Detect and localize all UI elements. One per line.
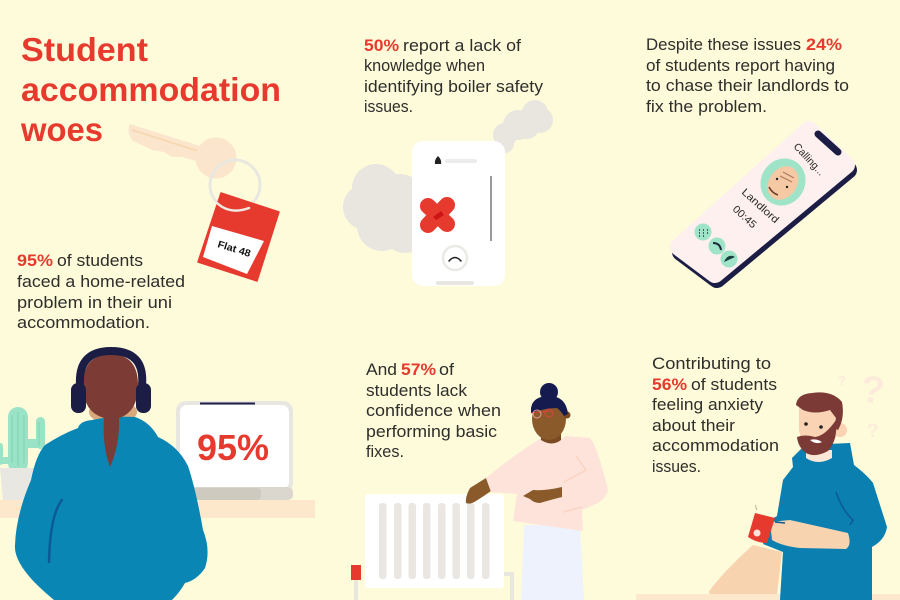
title xyxy=(20,31,281,148)
text block: and 57%: 57% xyxy=(401,360,436,379)
illustration: desk xyxy=(636,594,900,600)
title: Student xyxy=(21,31,148,68)
illustration: student with headphones xyxy=(15,351,208,600)
text block: 95% of students: faced a home-related xyxy=(17,272,185,291)
text block: 95% of students: of students xyxy=(57,251,143,270)
text block: contributing to 56%: accommodation xyxy=(652,436,779,455)
text block: contributing to 56%: about their xyxy=(652,416,735,435)
illustration: phone calling landlord: 00:45 xyxy=(730,203,759,231)
text block: contributing to 56%: issues. xyxy=(652,457,701,476)
text block: and 57%: performing basic xyxy=(366,422,498,441)
text block: despite these issues 24%: Despite these issues xyxy=(646,35,801,54)
illustration: question marks: ? xyxy=(867,421,879,442)
text block: and 57%: And xyxy=(366,360,397,379)
text block: despite these issues 24%: to chase their landlords to xyxy=(646,76,849,95)
illustration: question marks xyxy=(838,368,887,442)
text block: 50% report: 50% xyxy=(364,36,399,55)
text block: contributing to 56%: of students xyxy=(691,375,777,394)
illustration: phone calling landlord xyxy=(679,130,848,279)
illustration: woman checking radiator xyxy=(466,383,608,600)
title: woes xyxy=(20,111,103,148)
illustration: desk with cactus and laptop: 95% xyxy=(197,427,269,468)
text block: 50% report: issues. xyxy=(364,97,413,116)
text block: 95% of students: problem in their uni xyxy=(17,293,172,312)
title: accommodation xyxy=(21,71,281,108)
text block: contributing to 56%: Contributing to xyxy=(652,354,771,373)
text block: contributing to 56%: 56% xyxy=(652,375,687,394)
illustration: phone calling landlord: Calling... xyxy=(791,141,827,178)
text block: and 57% xyxy=(366,360,501,461)
text block: 95% of students: 95% xyxy=(17,251,53,270)
text block: 50% report xyxy=(364,36,544,116)
illustration: phone calling landlord: Landlord xyxy=(739,186,781,226)
text block: and 57%: of xyxy=(439,360,454,379)
illustration: question marks: ? xyxy=(838,373,846,388)
text block: contributing to 56%: feeling anxiety xyxy=(652,395,764,414)
icon: key with flat tag: Flat 48 xyxy=(216,239,252,260)
text block: contributing to 56% xyxy=(652,354,779,476)
text block: despite these issues 24%: of students report having xyxy=(646,56,835,75)
text block: 50% report: report a lack of xyxy=(403,36,521,55)
text block: despite these issues 24%: fix the problem. xyxy=(646,97,767,116)
icon: key with flat tag xyxy=(129,124,279,281)
text block: despite these issues 24%: 24% xyxy=(806,35,842,54)
illustration: desk with cactus and laptop xyxy=(0,401,315,518)
illustration: radiator xyxy=(351,494,512,600)
illustration: question marks: ? xyxy=(858,368,887,413)
text block: 50% report: identifying boiler safety xyxy=(364,77,544,96)
illustration: man with mug and hoodie xyxy=(709,392,887,600)
text block: and 57%: fixes. xyxy=(366,442,404,461)
text block: and 57%: confidence when xyxy=(366,401,501,420)
illustration: boiler with smoke xyxy=(343,100,553,286)
text block: 50% report: knowledge when xyxy=(364,56,485,75)
text block: 95% of students xyxy=(17,251,185,332)
text block: and 57%: students lack xyxy=(366,381,467,400)
text block: 95% of students: accommodation. xyxy=(17,313,150,332)
text block: despite these issues 24% xyxy=(646,35,849,116)
